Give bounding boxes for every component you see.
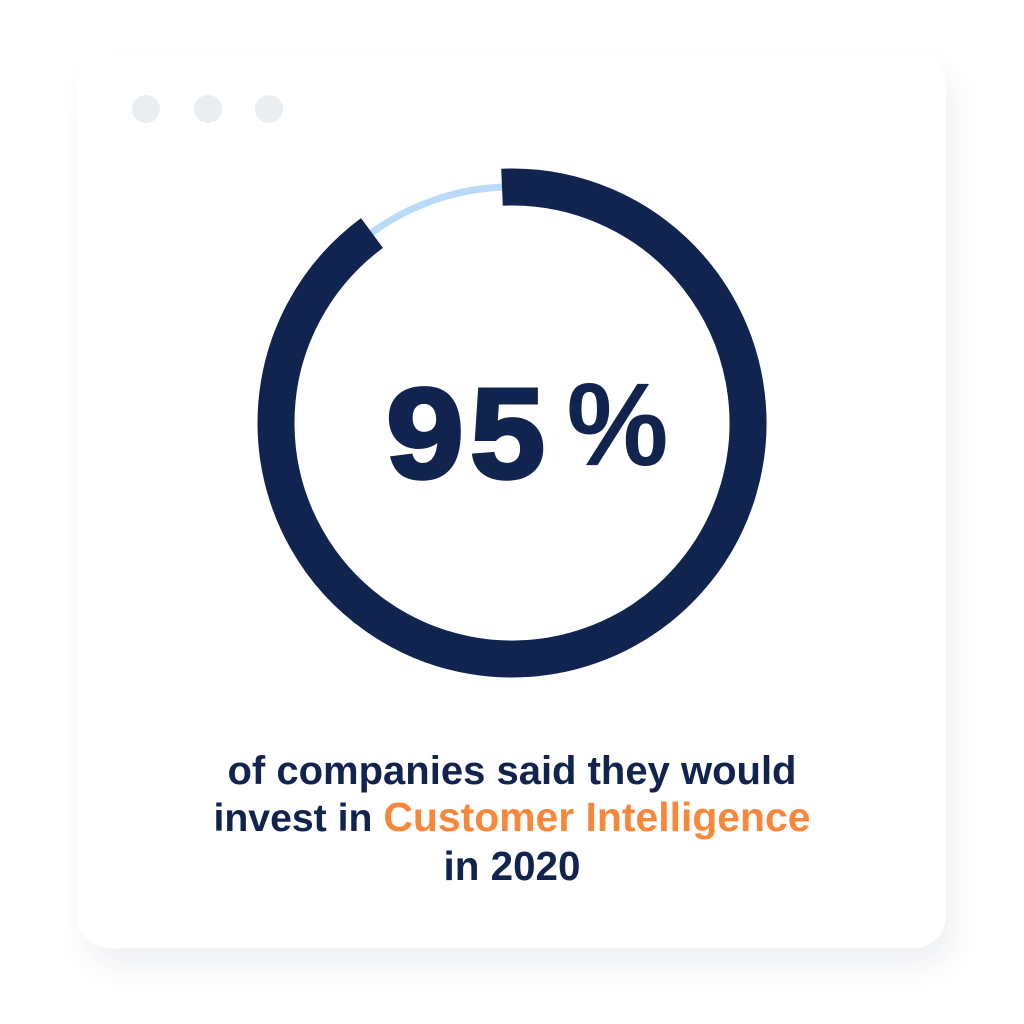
window controls xyxy=(132,95,283,123)
remaining 5% arc xyxy=(365,187,510,238)
caption text: of companies said they would xyxy=(228,749,796,793)
filled 95% arc xyxy=(276,187,748,659)
big number 95: 9 xyxy=(386,363,464,505)
big number 95 xyxy=(386,361,545,505)
panel: card xyxy=(77,52,946,948)
percent sign: % xyxy=(567,358,668,490)
caption text: invest in Customer Intelligence xyxy=(213,794,811,840)
caption text xyxy=(213,749,811,889)
caption text: in 2020 xyxy=(444,843,580,889)
big number 95: 5 xyxy=(470,361,545,505)
